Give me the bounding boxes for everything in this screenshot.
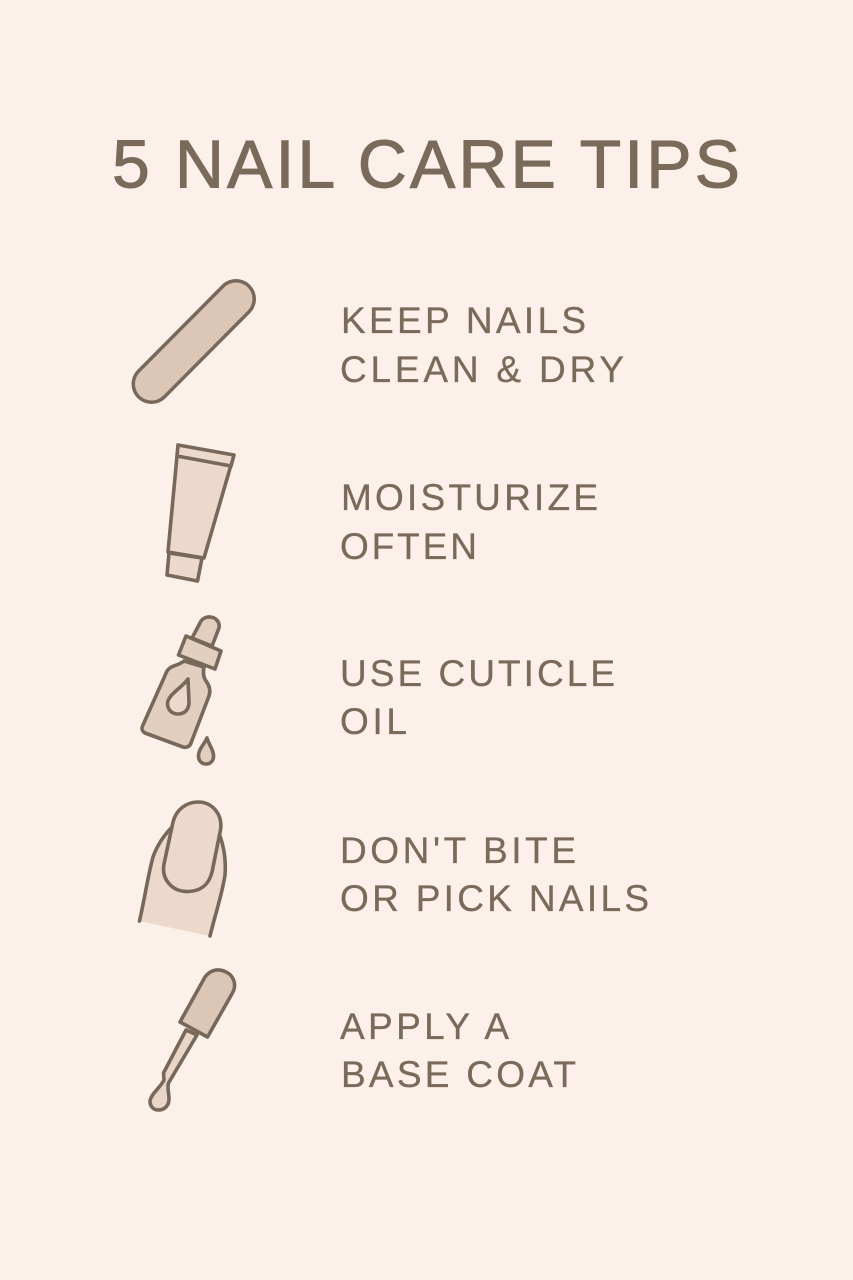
tip 2 text: MOISTURIZE	[341, 477, 598, 518]
tip 2 text: OFTEN	[340, 526, 477, 567]
tip 5 text	[340, 1006, 576, 1095]
tip 1 text: CLEAN & DRY	[340, 349, 624, 390]
tip 3 text: USE CUTICLE	[340, 653, 615, 694]
icon: cuticle oil dropper	[142, 617, 221, 764]
tip 4 text	[340, 830, 649, 919]
tip 5 text: APPLY A	[340, 1006, 509, 1047]
icon: cream tube	[167, 445, 234, 581]
tip 4 text: DON'T BITE	[340, 830, 576, 871]
tip 5 text: BASE COAT	[341, 1054, 576, 1095]
tip 3 text	[340, 653, 615, 742]
icon: nail file	[152, 299, 236, 384]
title: 5 NAIL CARE TIPS	[112, 126, 740, 202]
icon: base coat brush	[150, 970, 235, 1110]
tip 4 text: OR PICK NAILS	[340, 878, 649, 919]
tip 3 text: OIL	[340, 701, 407, 742]
tip 2 text	[340, 477, 598, 567]
icon: finger with nail	[139, 802, 225, 936]
tip 1 text: KEEP NAILS	[341, 300, 586, 341]
tip 1 text	[340, 300, 624, 390]
